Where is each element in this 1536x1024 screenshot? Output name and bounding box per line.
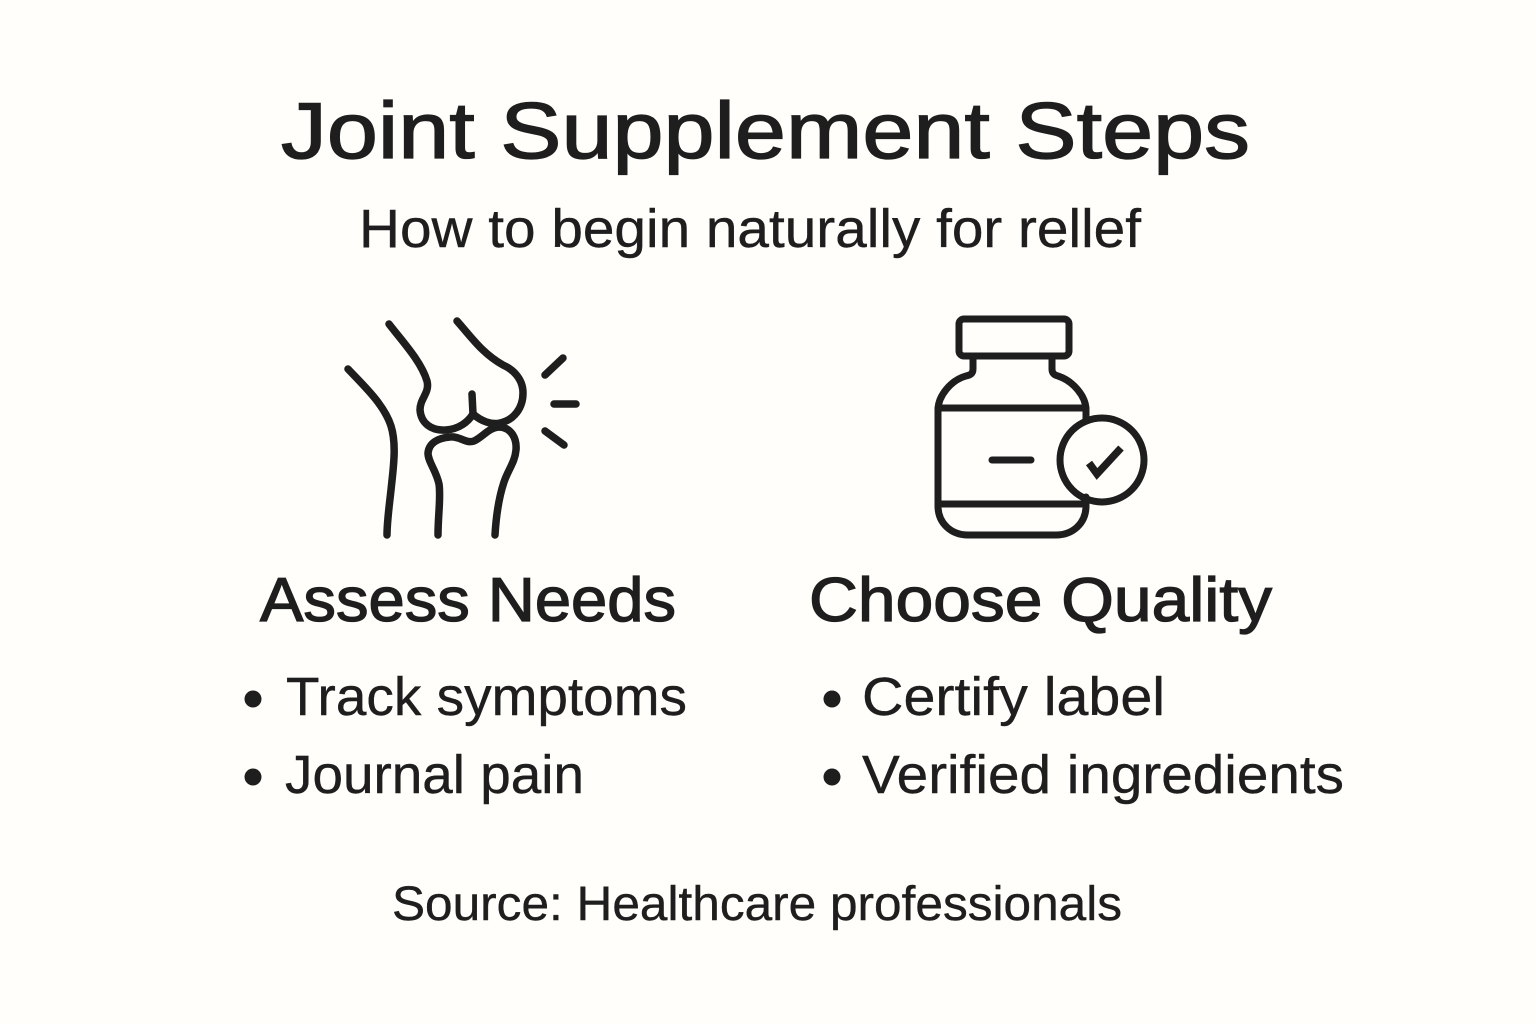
femur outline [389,321,523,430]
bullet [824,768,840,786]
bottle body [938,357,1086,535]
heading: choose quality: Choose Quality [809,566,1272,635]
back of leg line [348,369,394,535]
bullet [824,690,840,708]
label dash [992,456,1031,464]
bottle cap [959,319,1069,356]
check badge circle [1060,418,1144,502]
label bottom line [938,500,1086,508]
title: Joint Supplement Steps [281,86,1250,175]
tibia outline [428,427,516,535]
item: journal pain: Journal pain [285,745,584,805]
check mark [1089,448,1121,474]
pain mark bottom [545,431,564,445]
pain mark middle [554,400,576,408]
heading: assess needs: Assess Needs [260,566,676,635]
item: verified ingredients: Verified ingredients [862,745,1344,805]
item: track symptoms: Track symptoms [286,667,687,727]
label top line [938,404,1086,412]
bullet [244,690,262,708]
pain mark top [545,358,563,375]
icon: knee joint with pain marks [348,321,576,535]
femur notch [472,394,473,414]
item: certify label: Certify label [862,667,1165,727]
list: assess needs [244,667,687,805]
icon: supplement bottle with check badge [938,319,1144,535]
subtitle: How to begin naturally for rellef [359,199,1142,259]
list: choose quality [824,667,1344,805]
bullet [244,768,262,786]
source note: Source: Healthcare professionals [392,878,1122,931]
